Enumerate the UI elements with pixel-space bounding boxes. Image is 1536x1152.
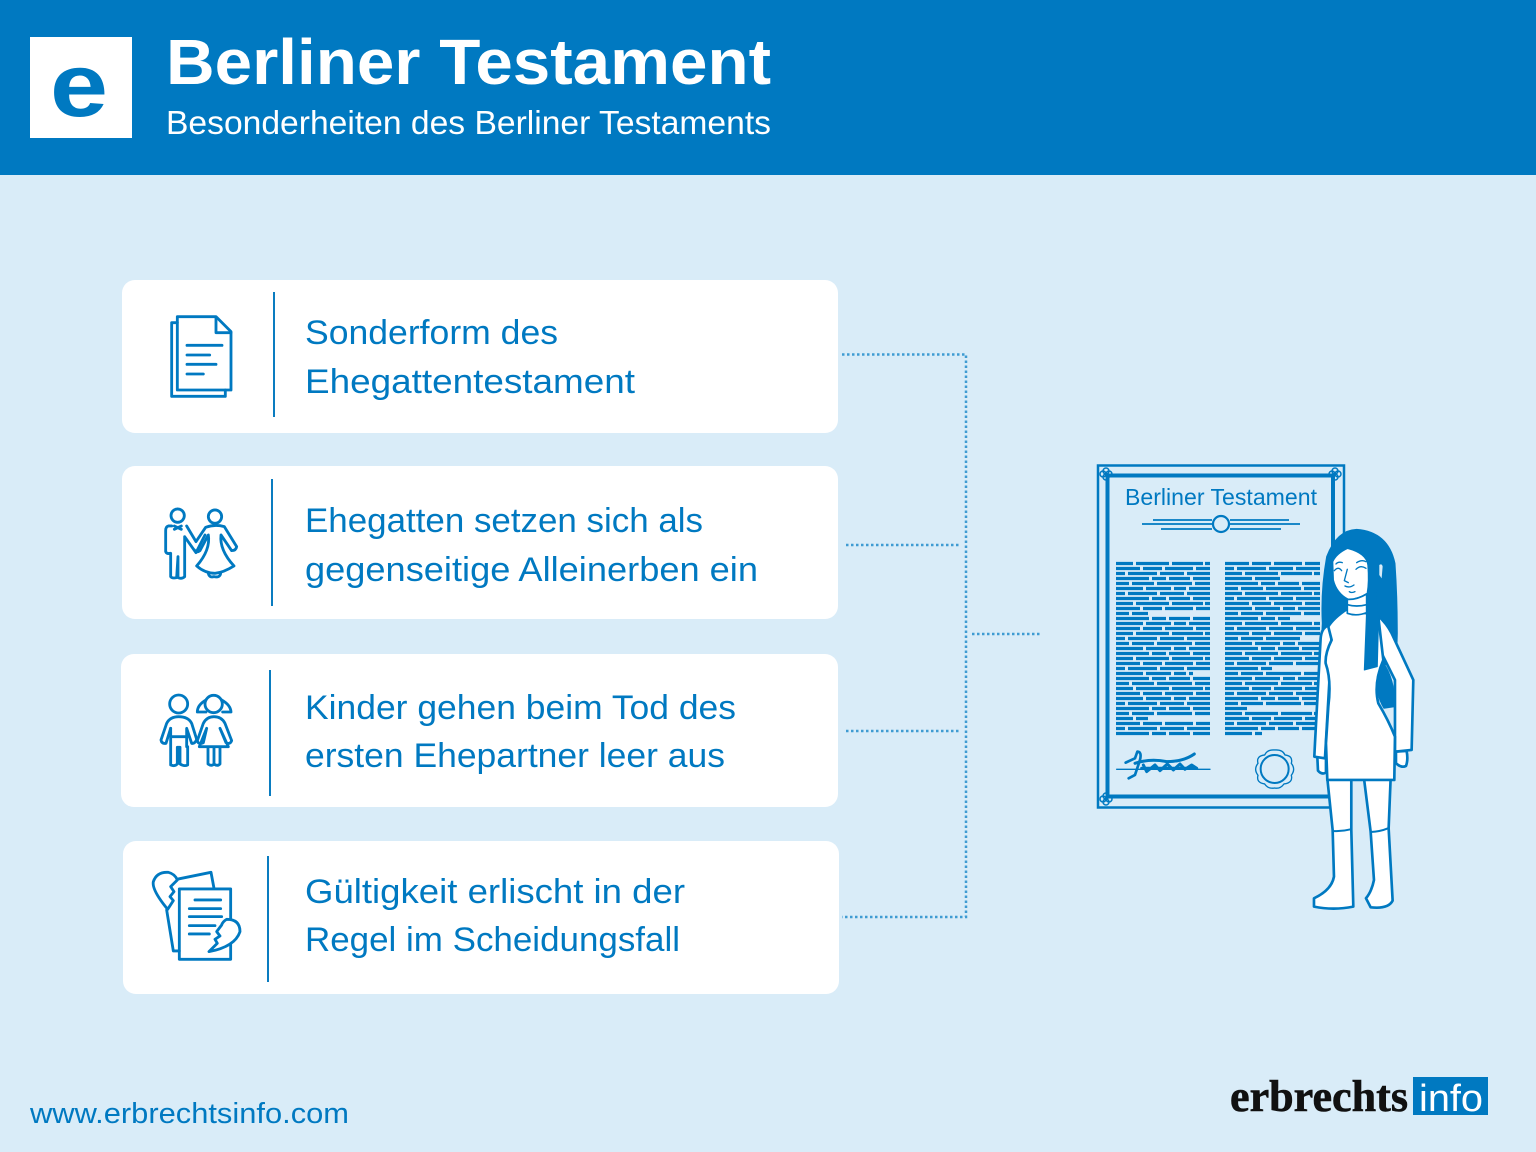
face: [1333, 548, 1369, 599]
lower hair: [1377, 662, 1395, 708]
neck and choker: [1347, 594, 1367, 615]
text: Kinder: [305, 689, 736, 775]
panel: Ehegatten: [122, 466, 838, 619]
legs and boots: [1314, 778, 1393, 909]
icon: couple: [166, 509, 237, 578]
text: Kinder: ersten Ehepartner leer aus: [305, 737, 725, 775]
text: Sonderform: Ehegattentestament: [305, 363, 636, 401]
signature: [1117, 752, 1210, 778]
seal: [1256, 750, 1294, 788]
hands: [1317, 751, 1407, 773]
logo: e: e: [50, 36, 108, 136]
dress: [1326, 609, 1395, 780]
text: Ehegatten: [305, 502, 758, 589]
facial features: [1334, 561, 1366, 592]
dotted connector: [842, 354, 1042, 917]
title: Berliner Testament: [166, 26, 771, 98]
brand logo: [1230, 1072, 1488, 1121]
icon: children: [161, 695, 232, 766]
icon: broken heart document: [153, 872, 240, 959]
text: Ehegatten: gegenseitige Alleinerben ein: [305, 551, 758, 589]
certificate frame: [1098, 466, 1344, 808]
panel: Sonderform: [122, 280, 838, 433]
subtitle: Besonderheiten des Berliner Testaments: [166, 104, 771, 141]
illustration: woman: [1314, 529, 1413, 909]
website url: www.erbrechtsinfo.com: [29, 1098, 349, 1130]
ear highlight: [1379, 564, 1383, 578]
front hair strand: [1364, 590, 1379, 670]
panel: Gueltigkeit: [123, 841, 839, 994]
document text lines, column 2: [1225, 564, 1320, 734]
logo: e: [30, 36, 132, 138]
brand logo: erbrechts: [1230, 1072, 1408, 1121]
ornament: [1142, 516, 1300, 532]
panel: Kinder: [121, 654, 838, 807]
header band: [0, 0, 1536, 175]
text: Sonderform: [305, 314, 636, 401]
text: Gueltigkeit: [305, 873, 685, 959]
document text lines, column 1: [1116, 564, 1210, 734]
sleeves: [1314, 616, 1413, 758]
text: Gueltigkeit: Regel im Scheidungsfall: [305, 921, 680, 959]
illustration: certificate document: [1098, 466, 1344, 808]
hair back: [1322, 529, 1397, 670]
certificate title: Berliner Testament: [1125, 484, 1318, 510]
brand logo: info: [1419, 1078, 1483, 1120]
text: Ehegatten: Ehegatten setzen sich als: [305, 502, 703, 540]
icon: documents: [172, 317, 231, 396]
text: Kinder: Kinder gehen beim Tod des: [305, 689, 736, 727]
text: Sonderform: Sonderform des: [305, 314, 558, 352]
text: Gueltigkeit: Gültigkeit erlischt in der: [305, 873, 685, 911]
